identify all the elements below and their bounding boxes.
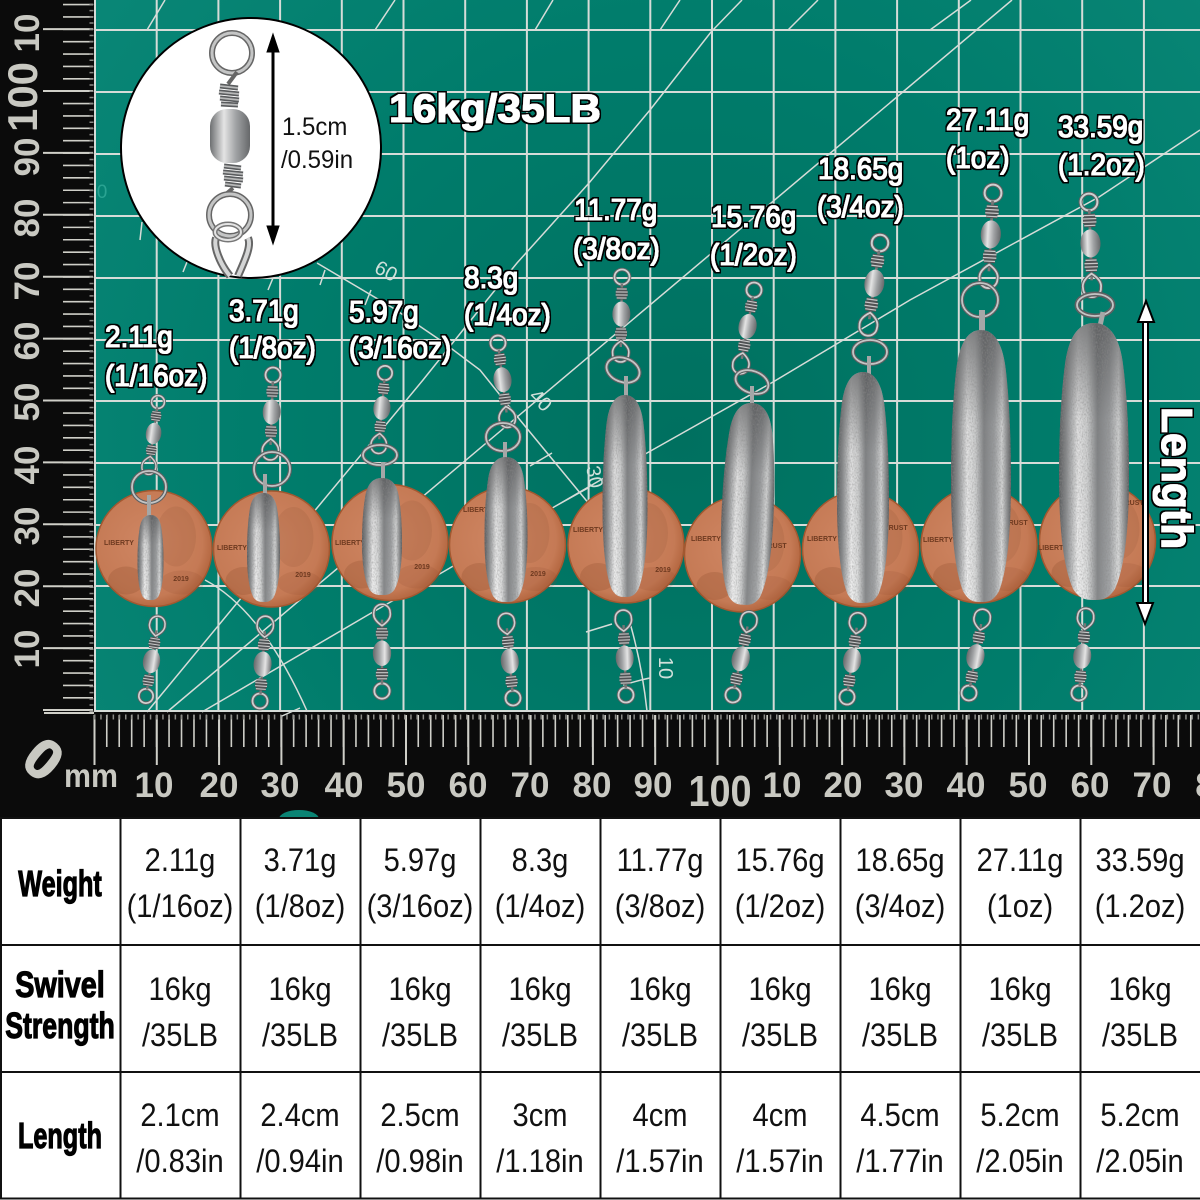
row: weight: 27.11g — [977, 843, 1063, 878]
left ruler: 40 — [8, 446, 47, 484]
row: weight: (1oz) — [987, 889, 1053, 924]
bottom ruler: 20 — [824, 766, 862, 805]
left ruler — [0, 0, 92, 712]
row: length: 4cm — [753, 1098, 807, 1133]
weight labels above sinkers: 33.59g — [1058, 110, 1143, 144]
rig 3: 5.97g sinker with penny: LIBERTY — [335, 540, 365, 547]
rig 4: 8.3g sinker with penny — [450, 334, 566, 706]
row: length: 4cm — [633, 1098, 687, 1133]
row: swivel strength: /35LB — [742, 1018, 818, 1053]
left ruler: 100 — [0, 62, 46, 132]
left ruler: 80 — [8, 199, 47, 237]
left ruler: 20 — [8, 569, 47, 607]
rig 3: 5.97g sinker with penny: 2019 — [414, 564, 430, 571]
rig 6: 15.76g sinker with penny: TRUST — [763, 543, 787, 550]
row: swivel strength: /35LB — [982, 1018, 1058, 1053]
row: length: 2.5cm — [380, 1098, 460, 1133]
row: length: 3cm — [513, 1098, 567, 1133]
row: length: /1.57in — [736, 1144, 824, 1179]
weight labels above sinkers: 11.77g — [574, 193, 657, 227]
row: swivel strength — [5, 964, 1178, 1053]
rig 8: 27.11g sinker with penny: TRUST — [1004, 520, 1028, 527]
row: length: /0.94in — [256, 1144, 344, 1179]
row: swivel strength: /35LB — [1102, 1018, 1178, 1053]
left ruler: 70 — [8, 262, 47, 300]
weight labels above sinkers: 2.11g — [105, 320, 173, 354]
heading: swivel strength: 16kg/35LB — [389, 86, 601, 131]
rig 3: 5.97g sinker with penny — [332, 365, 448, 699]
row: length: /2.05in — [976, 1144, 1064, 1179]
row: swivel strength: Strength — [5, 1005, 115, 1046]
row: swivel strength: /35LB — [142, 1018, 218, 1053]
row: swivel strength: 16kg — [268, 972, 332, 1007]
bottom ruler: 70 — [511, 766, 549, 805]
left ruler: 50 — [8, 383, 47, 421]
weight labels above sinkers: (3/8oz) — [573, 232, 660, 266]
bottom ruler: 60 — [1071, 766, 1109, 805]
panel: green cutting mat with grid — [94, 0, 1200, 716]
left ruler: 60 — [8, 322, 47, 360]
rig 2: 3.71g sinker with penny: LIBERTY — [217, 545, 247, 552]
bottom ruler: 10 — [135, 766, 173, 805]
row: length: Length — [18, 1116, 102, 1156]
row: swivel strength: /35LB — [262, 1018, 338, 1053]
rig 5: 11.77g sinker with penny: LIBERTY — [573, 527, 603, 534]
row: weight: (3/4oz) — [855, 889, 945, 924]
panel: green cutting mat with grid: 60 — [371, 257, 401, 287]
swivel size text: 1.5cm — [282, 114, 347, 141]
rig 4: 8.3g sinker with penny: LIBERTY — [463, 507, 493, 514]
row: length — [18, 1098, 1184, 1179]
bottom ruler: 20 — [200, 766, 238, 805]
left ruler: 90 — [8, 138, 47, 176]
weight labels above sinkers: 3.71g — [229, 294, 299, 328]
row: length: 5.2cm — [1100, 1098, 1180, 1133]
weight labels above sinkers: (1oz) — [946, 141, 1010, 175]
row: weight: 33.59g — [1095, 843, 1185, 878]
row: weight: (1.2oz) — [1095, 889, 1185, 924]
weight labels above sinkers — [105, 103, 1145, 393]
length label: Length — [1152, 407, 1200, 549]
rig 9: 33.59g sinker with penny: LIBERTY — [1038, 545, 1068, 552]
bottom ruler: 100 — [688, 766, 752, 816]
rig 7: 18.65g sinker with penny: LIBERTY — [807, 536, 837, 543]
row: length: /0.83in — [136, 1144, 224, 1179]
row: weight: (1/4oz) — [495, 889, 585, 924]
rig 1: 2.11g sinker with penny: LIBERTY — [104, 540, 134, 547]
row: length: 4.5cm — [860, 1098, 940, 1133]
bottom ruler: 60 — [449, 766, 487, 805]
row: length: 2.4cm — [260, 1098, 340, 1133]
row: weight: (1/8oz) — [255, 889, 345, 924]
rig 7: 18.65g sinker with penny — [802, 233, 918, 706]
rig 9: 33.59g sinker with penny — [1038, 193, 1156, 701]
rig 6: 15.76g sinker with penny — [684, 281, 800, 704]
row: swivel strength: /35LB — [502, 1018, 578, 1053]
bottom ruler: 30 — [261, 766, 299, 805]
panel: green cutting mat with grid: 40 — [525, 385, 556, 416]
weight labels above sinkers: (1.2oz) — [1058, 148, 1145, 182]
bottom ruler: 90 — [634, 766, 672, 805]
left ruler: 10 — [8, 14, 47, 52]
weight labels above sinkers: 5.97g — [349, 295, 419, 329]
row: swivel strength: 16kg — [868, 972, 932, 1007]
row: weight: 2.11g — [145, 843, 215, 878]
row: weight: (1/2oz) — [735, 889, 825, 924]
bottom ruler: 40 — [947, 766, 985, 805]
row: weight — [18, 843, 1185, 924]
row: length: 2.1cm — [140, 1098, 220, 1133]
swivel size text — [281, 114, 353, 174]
weight labels above sinkers: 18.65g — [818, 152, 903, 186]
rig 5: 11.77g sinker with penny: 2019 — [655, 567, 671, 574]
bottom ruler: 80 — [573, 766, 611, 805]
rig 1: 2.11g sinker with penny: 2019 — [173, 576, 189, 583]
row: weight: (3/8oz) — [615, 889, 705, 924]
panel: green cutting mat with grid: 0 — [97, 182, 107, 203]
panel: green cutting mat with grid: 30 — [581, 464, 607, 490]
weight labels above sinkers: (3/16oz) — [349, 331, 451, 365]
left ruler: 30 — [8, 507, 47, 545]
swivel size text: /0.59in — [281, 147, 353, 174]
rig 4: 8.3g sinker with penny: 2019 — [530, 571, 546, 578]
row: swivel strength: 16kg — [1108, 972, 1172, 1007]
row: weight: (1/16oz) — [127, 889, 233, 924]
row: length: /1.18in — [496, 1144, 584, 1179]
row: length: /1.57in — [616, 1144, 704, 1179]
weight labels above sinkers: (1/16oz) — [105, 359, 207, 393]
background: black cutting mat — [0, 0, 1200, 818]
row: swivel strength: /35LB — [862, 1018, 938, 1053]
row: weight: 18.65g — [855, 843, 945, 878]
rig 2: 3.71g sinker with penny: 2019 — [295, 572, 311, 579]
rig 1: 2.11g sinker with penny — [96, 395, 212, 704]
bottom ruler: 70 — [1133, 766, 1171, 805]
row: swivel strength: 16kg — [988, 972, 1052, 1007]
bottom ruler: 40 — [325, 766, 363, 805]
arrow: length — [1137, 301, 1154, 624]
row: length: /2.05in — [1096, 1144, 1184, 1179]
panel: green cutting mat with grid: 10 — [654, 657, 676, 679]
weight labels above sinkers: 8.3g — [464, 261, 518, 295]
row: weight: 11.77g — [617, 843, 703, 878]
row: weight: 5.97g — [384, 843, 456, 878]
weight labels above sinkers: (1/4oz) — [464, 298, 551, 332]
rig 7: 18.65g sinker with penny: TRUST — [884, 525, 908, 532]
rig 5: 11.77g sinker with penny — [568, 269, 684, 703]
row: swivel strength: 16kg — [148, 972, 212, 1007]
row: weight: 3.71g — [264, 843, 336, 878]
weight labels above sinkers: 27.11g — [946, 103, 1029, 137]
row: swivel strength: /35LB — [382, 1018, 458, 1053]
bottom ruler: 50 — [387, 766, 425, 805]
weight labels above sinkers: (1/8oz) — [229, 331, 316, 365]
left ruler: 10 — [8, 630, 47, 668]
weight labels above sinkers: (3/4oz) — [817, 190, 904, 224]
row: swivel strength: Swivel — [15, 964, 105, 1005]
row: length: 5.2cm — [980, 1098, 1060, 1133]
table: specifications — [0, 817, 1200, 1200]
bottom ruler: 50 — [1009, 766, 1047, 805]
row: swivel strength: /35LB — [622, 1018, 698, 1053]
row: length: /0.98in — [376, 1144, 464, 1179]
rig 8: 27.11g sinker with penny — [921, 184, 1037, 702]
ruler zero: 0 — [11, 725, 76, 793]
row: swivel strength: 16kg — [508, 972, 572, 1007]
weight labels above sinkers: (1/2oz) — [710, 238, 797, 272]
row: weight: (3/16oz) — [367, 889, 473, 924]
row: weight: 15.76g — [735, 843, 825, 878]
weight labels above sinkers: 15.76g — [711, 200, 796, 234]
arrow: swivel height — [267, 34, 279, 244]
rig 8: 27.11g sinker with penny: LIBERTY — [923, 537, 953, 544]
rig 9: 33.59g sinker with penny: TRUST — [1120, 500, 1144, 507]
rig 2: 3.71g sinker with penny — [214, 367, 330, 709]
callout: swivel detail circle — [121, 18, 381, 278]
icon: enlarged swivel — [209, 33, 252, 276]
row: length: /1.77in — [856, 1144, 944, 1179]
bottom ruler: 10 — [763, 766, 801, 805]
row: weight: 8.3g — [512, 843, 568, 878]
rig 6: 15.76g sinker with penny: LIBERTY — [691, 536, 721, 543]
ruler unit: mm — [64, 757, 118, 794]
row: swivel strength: 16kg — [628, 972, 692, 1007]
row: weight: Weight — [18, 864, 102, 904]
bottom ruler: 30 — [885, 766, 923, 805]
row: swivel strength: 16kg — [748, 972, 812, 1007]
row: swivel strength: 16kg — [388, 972, 452, 1007]
bottom ruler — [11, 713, 1200, 828]
